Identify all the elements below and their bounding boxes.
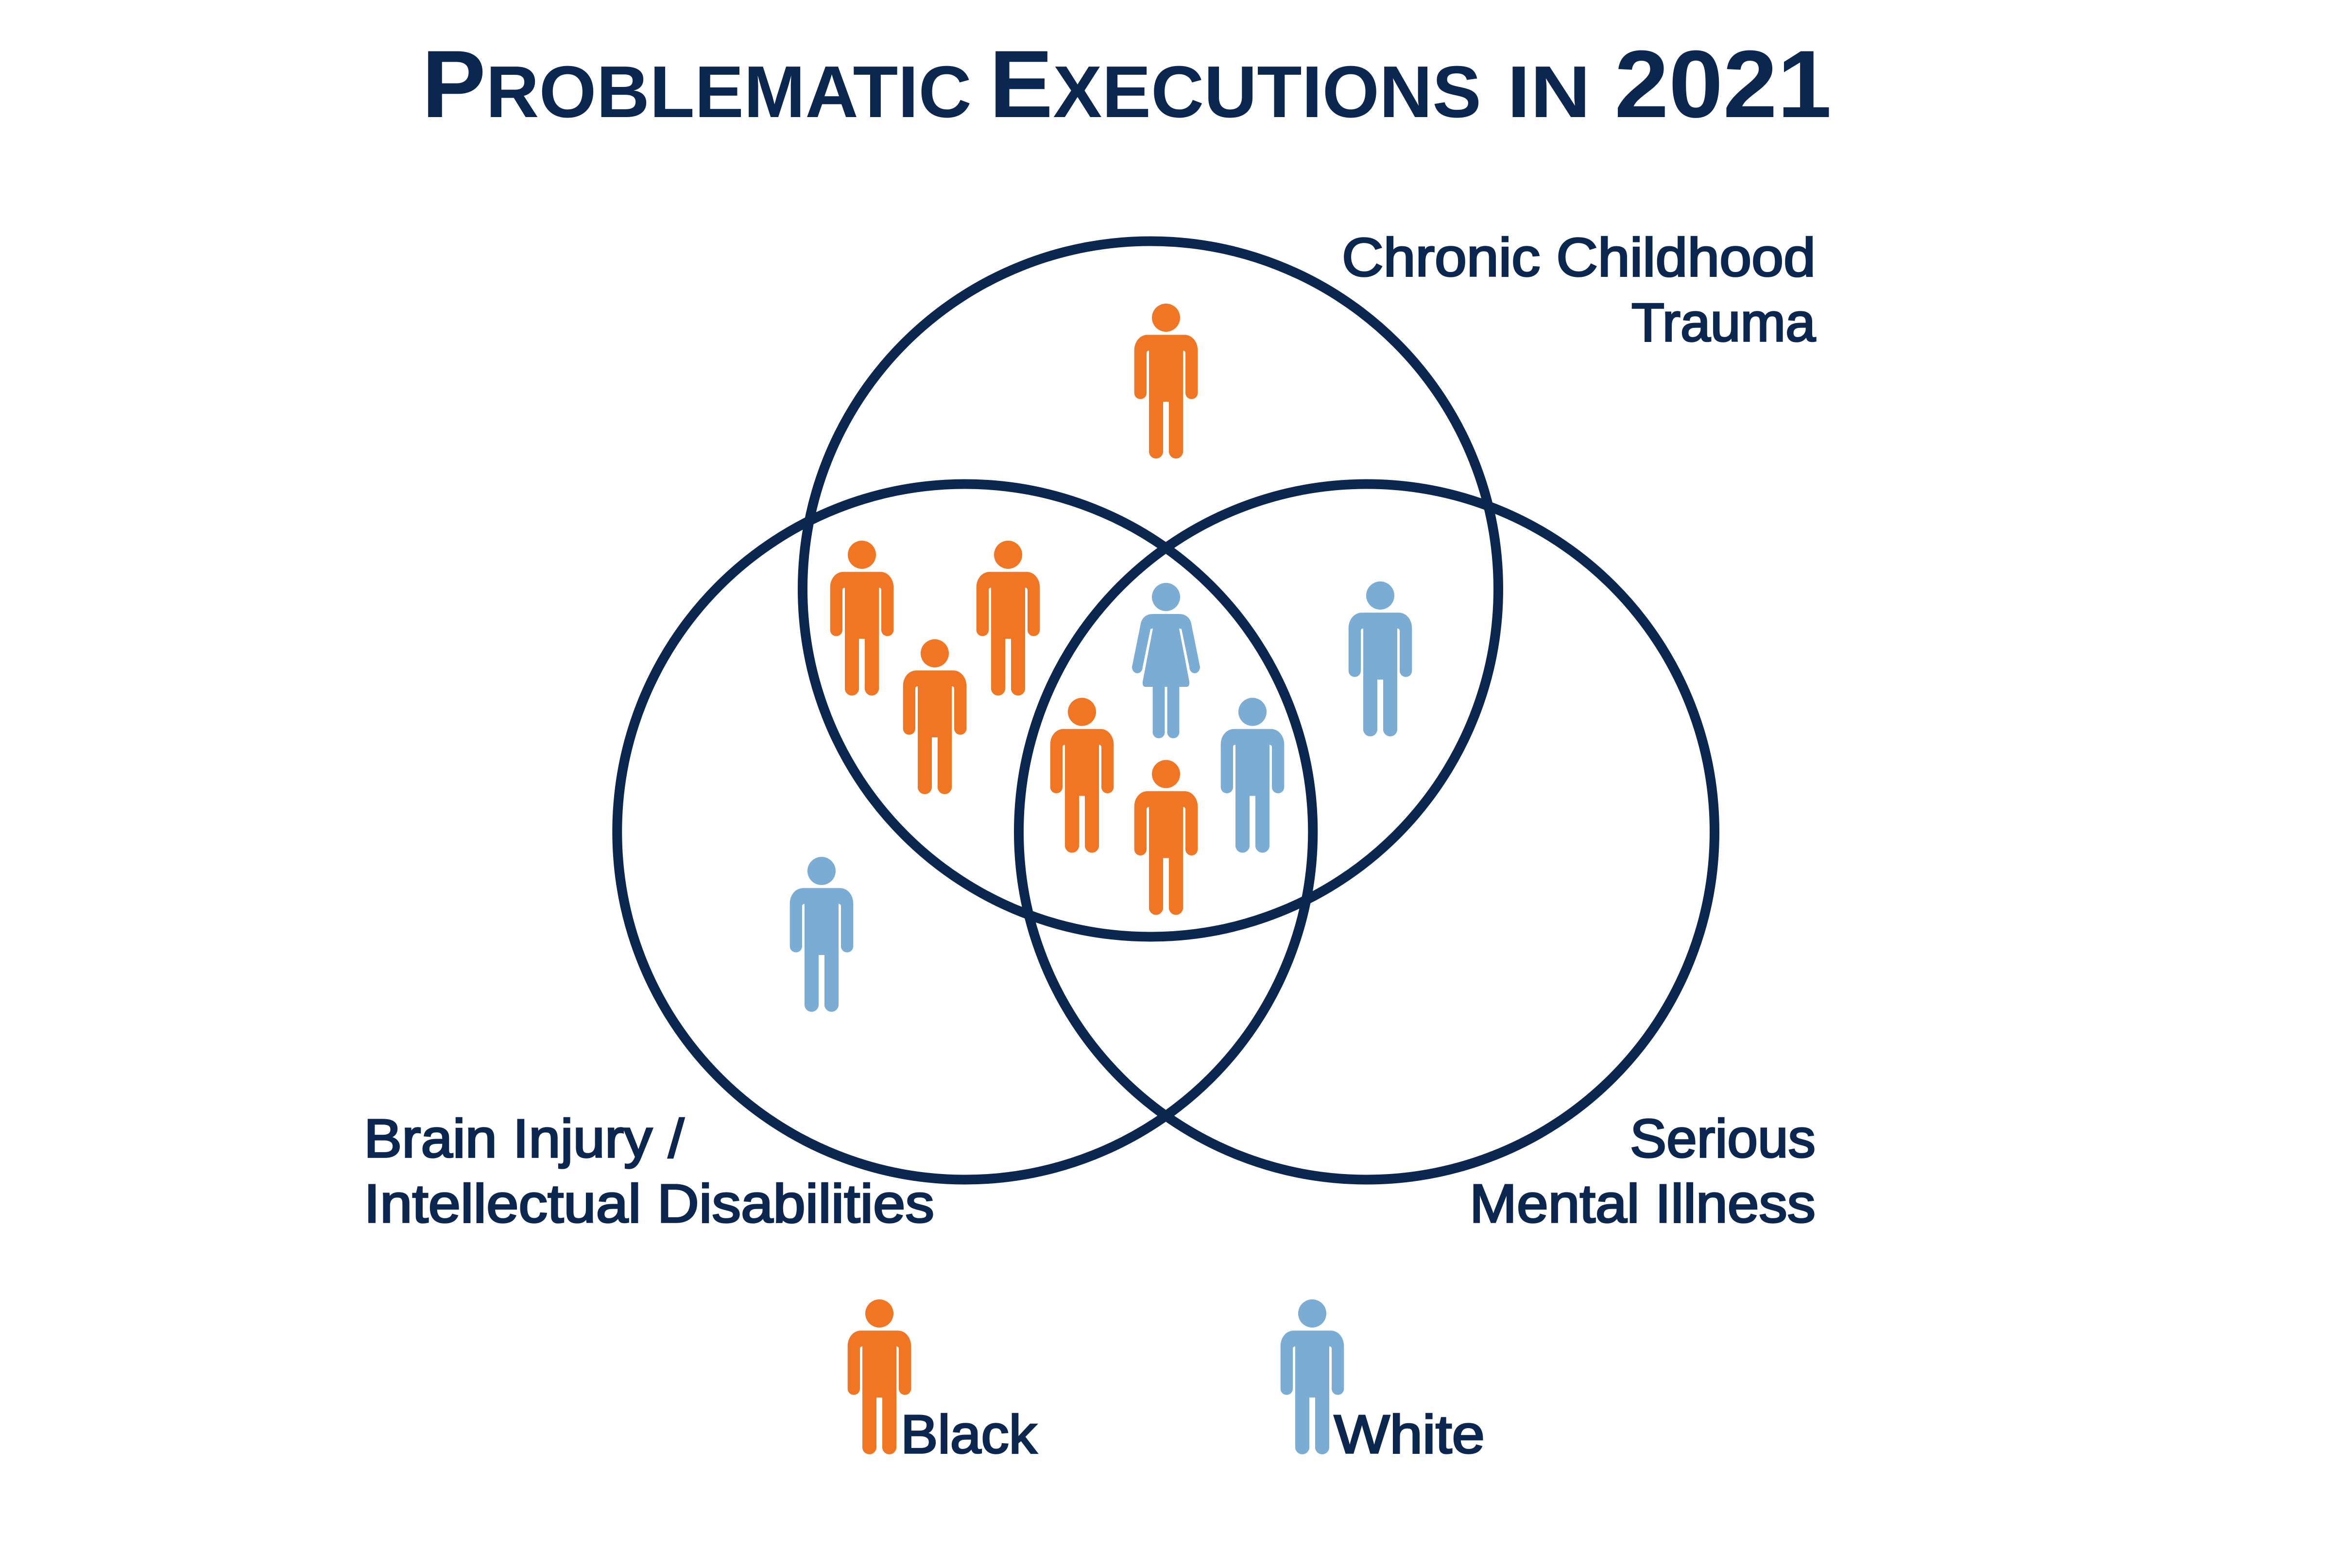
legend: white — [1281, 1299, 1485, 1465]
label: chronic childhood trauma — [1342, 227, 1816, 353]
circle: serious mental illness — [1019, 484, 1715, 1179]
venn diagram circles — [617, 241, 1715, 1179]
label: chronic childhood trauma: Trauma — [1631, 292, 1816, 353]
title: EXECUTIONS — [989, 31, 1481, 137]
title: IN — [1507, 51, 1591, 133]
label: brain injury / intellectual disabilities — [364, 1108, 934, 1234]
person: brain injury only — [790, 857, 853, 1012]
people: trauma and brain injury — [830, 541, 1040, 794]
icon: orange person — [848, 1299, 911, 1454]
label: serious mental illness: Mental Illness — [1470, 1174, 1816, 1234]
label: brain injury / intellectual disabilities: Intellectual Disabilities — [364, 1174, 934, 1234]
people: all three conditions, blue — [1132, 583, 1284, 852]
label: brain injury / intellectual disabilities: Brain Injury / — [364, 1108, 684, 1169]
label: chronic childhood trauma: Chronic Childhood — [1342, 227, 1816, 288]
circle: chronic childhood trauma — [803, 241, 1498, 937]
title — [422, 31, 1832, 137]
people: all three conditions, orange — [1050, 698, 1198, 915]
legend label: white: White — [1334, 1404, 1485, 1465]
people: trauma only — [1134, 304, 1198, 459]
person: trauma and mental illness — [1349, 581, 1412, 736]
title: PROBLEMATIC — [422, 31, 972, 137]
title: 2021 — [1614, 31, 1832, 137]
legend label: black: Black — [901, 1404, 1037, 1465]
label: serious mental illness — [1470, 1108, 1816, 1234]
legend: black — [848, 1299, 1037, 1465]
label: serious mental illness: Serious — [1630, 1108, 1816, 1169]
icon: blue person — [1281, 1299, 1344, 1454]
circle: brain injury / intellectual disabilities — [617, 484, 1313, 1179]
